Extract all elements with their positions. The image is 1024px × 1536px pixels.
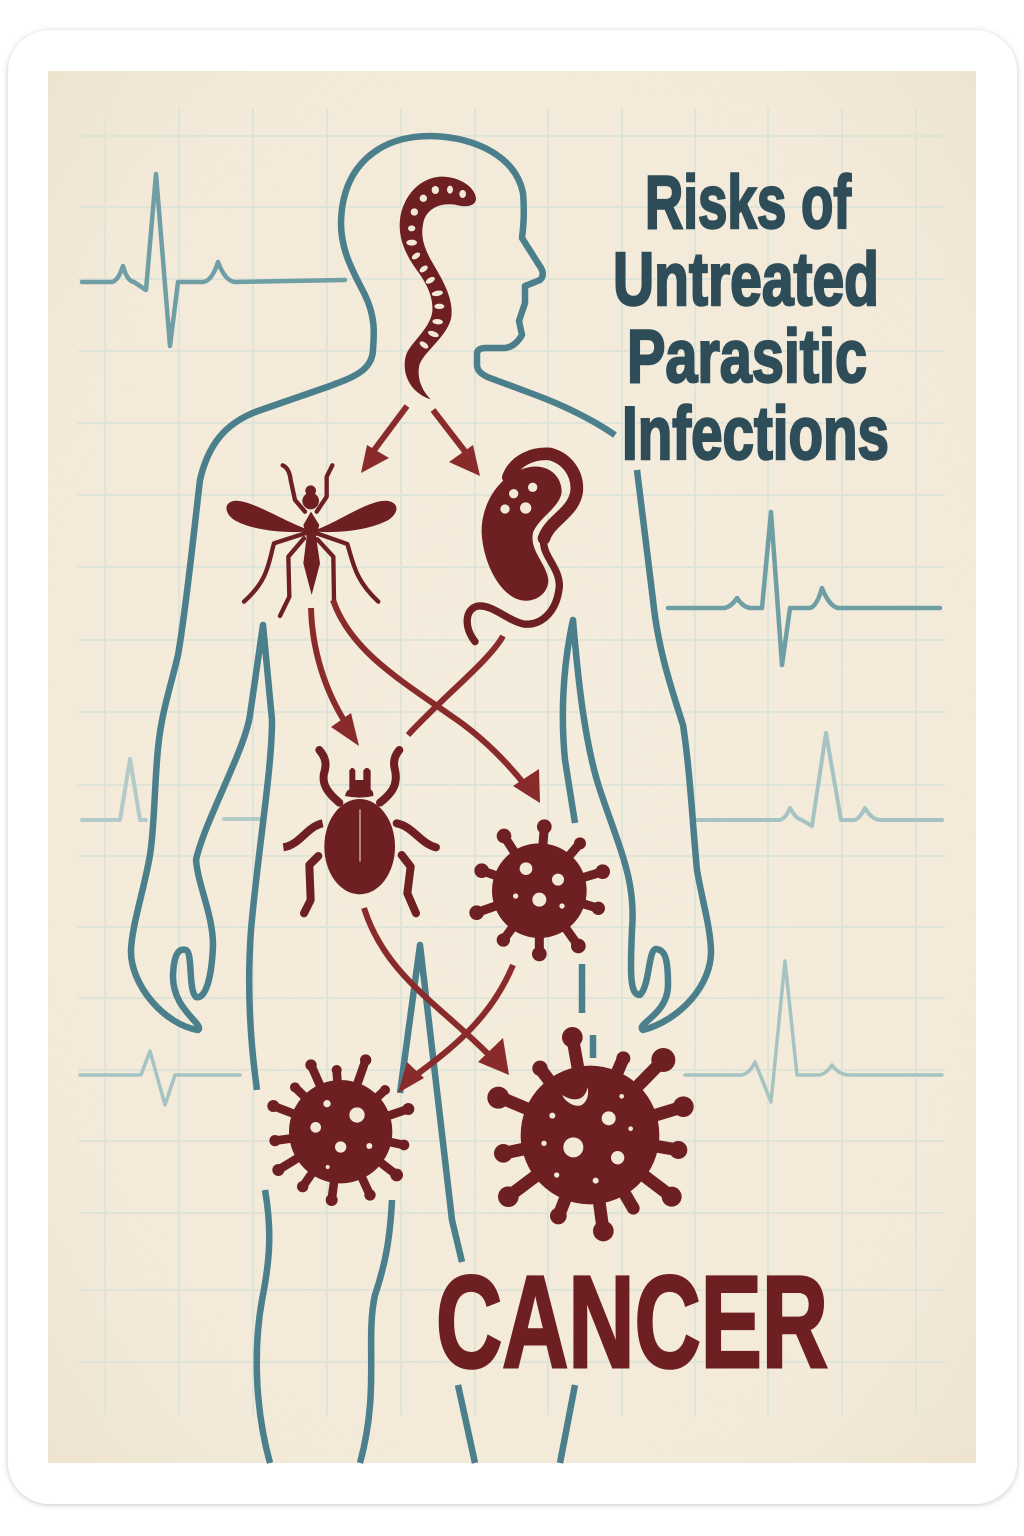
ECG trace: right middle: [695, 733, 942, 826]
ECG trace: left middle: [82, 759, 260, 820]
arrow: mosquito to virus: [333, 600, 540, 803]
arrow: kidney to tick: [408, 636, 503, 735]
icon: virus lower left: [267, 1054, 414, 1206]
title: Infections: [622, 391, 889, 475]
icon: worm: [400, 177, 476, 399]
title: Risks of: [645, 160, 852, 244]
head and left side: [131, 136, 615, 1090]
arrow: tick to large virus: [364, 908, 509, 1075]
title: Untreated: [613, 237, 879, 321]
title: Parasitic: [627, 314, 867, 398]
right arm and torso: [563, 470, 711, 1030]
icon: mosquito: [226, 465, 396, 616]
upper organisms: [226, 177, 577, 642]
cancer label: CANCER: [436, 1248, 828, 1395]
ECG trace: right upper: [668, 512, 940, 665]
human body outline: [131, 136, 711, 1463]
groin left: [400, 945, 462, 1262]
ECG trace: lower right: [685, 961, 942, 1102]
icon: tick: [283, 750, 436, 913]
arrow: virus to lower-left virus: [398, 965, 513, 1093]
icon: kidney: [467, 454, 577, 642]
icon: virus small right: [469, 819, 610, 961]
arrows: [311, 406, 540, 1093]
arrow: mosquito to tick: [311, 608, 359, 746]
title: [613, 160, 889, 475]
inner left leg: [360, 1200, 392, 1463]
icon: virus large: [487, 1027, 694, 1241]
ECG trace: lower left: [80, 1051, 240, 1105]
right leg lower: [458, 964, 593, 1463]
arrow: worm to mosquito: [361, 406, 407, 473]
ECG trace: upper left: [82, 174, 345, 346]
left thigh: [257, 1190, 270, 1463]
arrow: worm to kidney: [433, 410, 480, 476]
lower organisms: [267, 750, 694, 1241]
